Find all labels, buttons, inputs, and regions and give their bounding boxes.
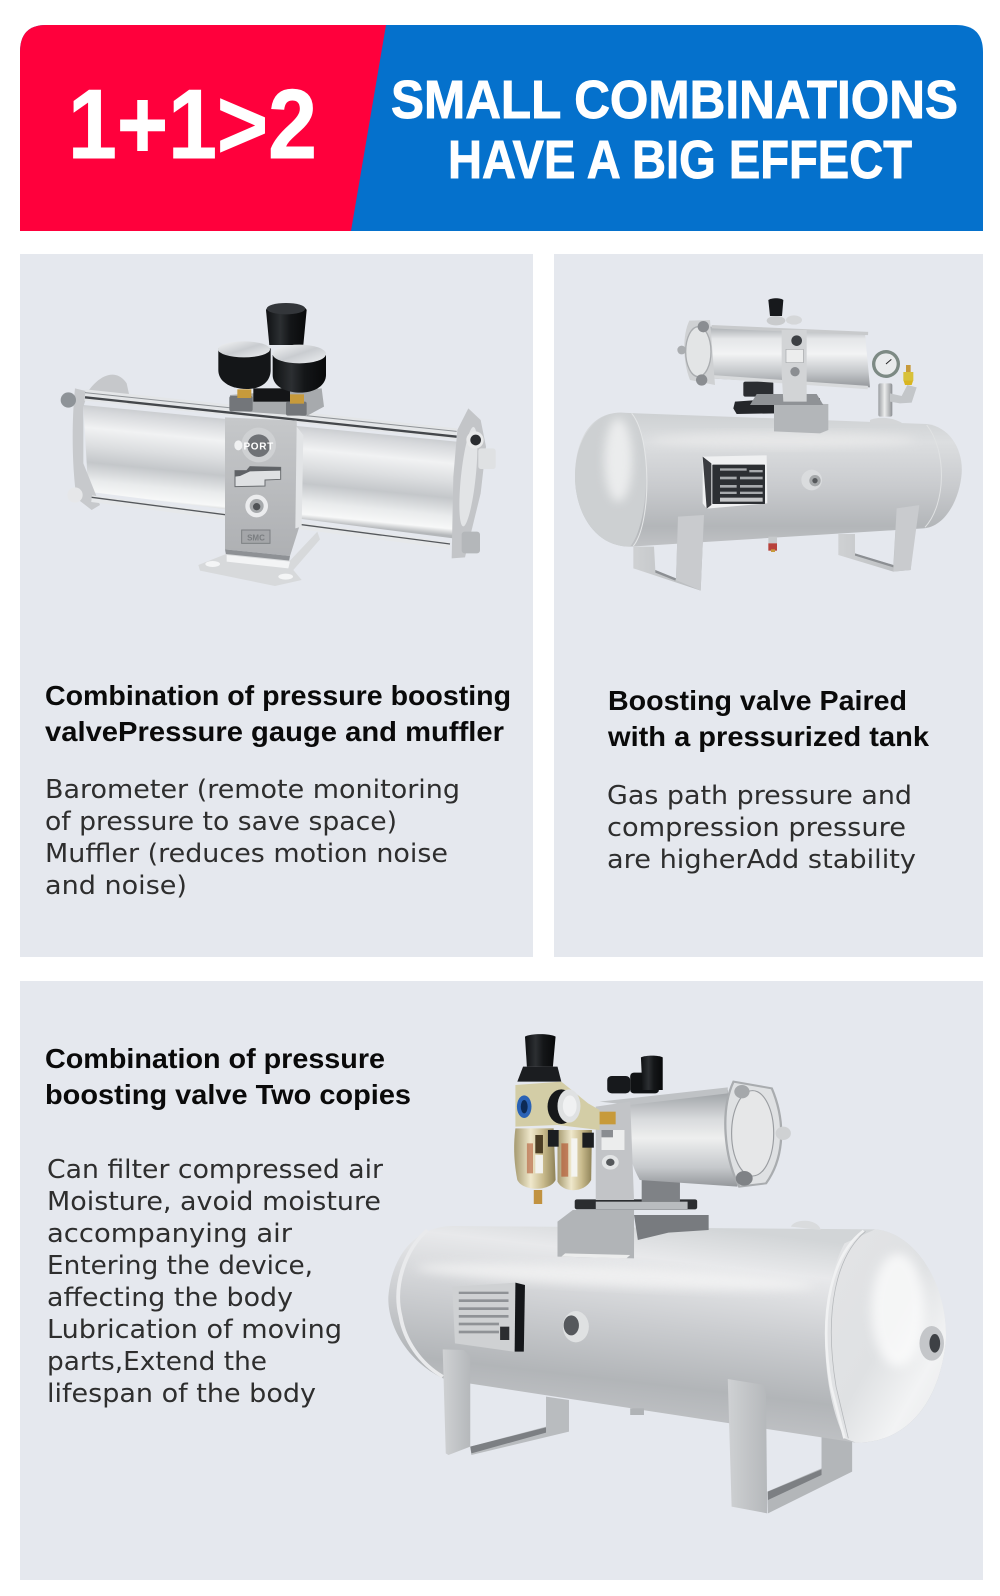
product photo: boosting valve: SMC — [247, 534, 265, 543]
description: Lubrication of moving — [47, 1315, 342, 1345]
heading: Combination of pressure — [45, 1043, 385, 1074]
panel: boosting valve with filter on tank — [20, 981, 983, 1580]
banner blue background — [20, 25, 983, 231]
product photo: boosting valve: PORT — [243, 441, 274, 452]
panel: pressure boosting valve with gauge and muffler — [20, 254, 533, 957]
description: affecting the body — [47, 1283, 293, 1313]
description — [607, 781, 916, 875]
description — [45, 775, 460, 901]
product photo: boosting valve — [61, 303, 496, 586]
banner red slanted block — [20, 25, 386, 231]
description: Moisture, avoid moisture — [47, 1187, 381, 1217]
headline: HAVE A BIG EFFECT — [448, 130, 912, 190]
description: and noise) — [45, 871, 187, 901]
heading: Combination of pressure boosting — [45, 680, 511, 711]
description: of pressure to save space) — [45, 807, 397, 837]
description: Gas path pressure and — [607, 781, 912, 811]
headline: SMALL COMBINATIONS — [391, 70, 958, 130]
heading: valvePressure gauge and muffler — [45, 716, 504, 747]
headline — [391, 70, 958, 190]
panel background — [20, 254, 533, 957]
heading: boosting valve Two copies — [45, 1079, 411, 1110]
description — [47, 1155, 383, 1409]
panel background — [20, 981, 983, 1580]
description: parts,Extend the — [47, 1347, 267, 1377]
heading — [45, 680, 511, 747]
description: lifespan of the body — [47, 1379, 316, 1409]
description: accompanying air — [47, 1219, 292, 1249]
description: are higherAdd stability — [607, 845, 916, 875]
description: Can filter compressed air — [47, 1155, 383, 1185]
product photo: valve on tank — [575, 298, 962, 591]
panel: boosting valve paired with tank — [554, 254, 983, 957]
heading: with a pressurized tank — [607, 721, 930, 752]
heading — [45, 1043, 411, 1110]
heading — [607, 685, 930, 752]
panel background — [554, 254, 983, 957]
description: Barometer (remote monitoring — [45, 775, 460, 805]
description: Entering the device, — [47, 1251, 313, 1281]
banner — [20, 25, 983, 231]
equation 1+1>2: 1+1>2 — [68, 69, 317, 179]
product photo: filter, valve and tank — [388, 1034, 946, 1513]
heading: Boosting valve Paired — [608, 685, 907, 716]
description: compression pressure — [607, 813, 906, 843]
description: Muffler (reduces motion noise — [45, 839, 448, 869]
